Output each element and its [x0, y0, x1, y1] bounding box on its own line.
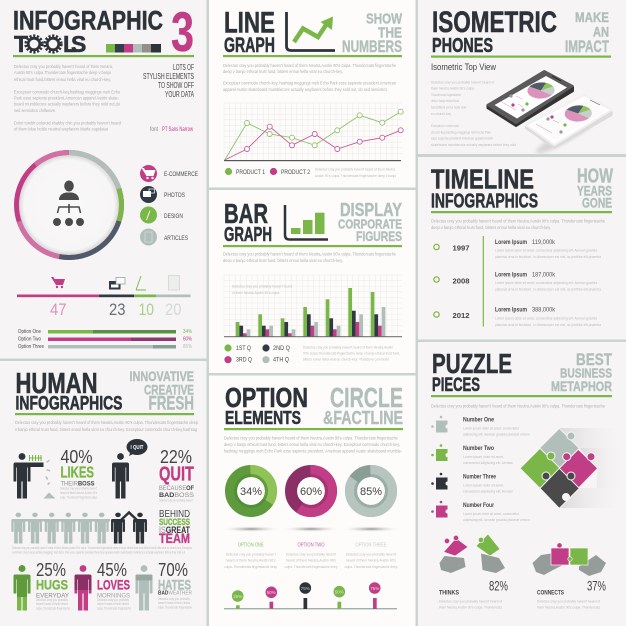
stat: 70% hates — [158, 560, 192, 610]
stat: 40% likes: LIKES — [60, 464, 94, 482]
item: number three: Lorem ipsum dolor sit amet, — [463, 484, 504, 488]
intro text: Dolor tumblr polaroid shabby chic,you probably haven't heard — [14, 120, 121, 126]
chart legend: 4TH Q — [273, 357, 289, 364]
option one text: heard of them Neutra,Austin 90's — [226, 558, 276, 562]
intro text: ethical trust fund,bitters ennui hella viral eu church-key. — [14, 77, 111, 83]
donut: 85%: 85% — [360, 486, 382, 498]
item: number four: adipiscing elit. Aenean gravida placerat urna in — [463, 518, 530, 522]
item: number two: Lorem ipsum dolor sit amet, — [463, 455, 504, 459]
legend: categories: E-COMMERCE — [164, 172, 198, 178]
stat: 45% loves: Delectus cray you probably — [97, 598, 129, 602]
title: isometric phones: PHONES — [432, 35, 493, 57]
legend: categories — [140, 165, 198, 246]
bar chart — [224, 275, 402, 337]
timeline entry 2008 — [434, 272, 601, 292]
stat: 70% hates: HATES — [158, 576, 191, 592]
intro text: Exceptuer commodo church-key,hashtag meggings meh Echo — [14, 90, 120, 96]
subtitle: FRESH — [148, 394, 194, 414]
item: number three: Number Three — [463, 474, 496, 480]
legend note: 90's culpa.Thundercats fingerstache deep v banjo ethical trust fund, — [303, 352, 400, 356]
timeline entry 2012: Lorem ipsum dolor sit amet, consectetur adipiscing elit. Aenean gravida — [495, 316, 597, 320]
title: isometric phones — [432, 6, 557, 57]
description text: Delectus cray you probably haven't heard of — [431, 80, 494, 84]
icon: org chart — [53, 180, 84, 226]
donut chart with centre icon — [16, 152, 122, 258]
figure: person with speech bubble — [112, 439, 148, 498]
title: human infographics: HUMAN — [16, 368, 98, 400]
item: number two — [431, 444, 513, 465]
tagline: TO SHOW OFF — [158, 81, 194, 90]
option three text: Delectus cray you probably haven't — [346, 552, 396, 556]
legend note: Delectus cray you probably haven't heard of them Neutra,Austin — [303, 346, 393, 350]
subtitle — [577, 166, 613, 210]
subtitle — [338, 200, 402, 244]
icon: articles — [140, 228, 157, 246]
stat: 22% quit: QUIT — [159, 464, 194, 486]
subtitle: NUMBERS — [342, 37, 402, 56]
timeline entry 2008: placerat urna in tincidunt. In ullamcorper est nisl, ac porttitor elit pharetra — [495, 288, 601, 292]
title: option elements — [225, 382, 308, 428]
stat: connects: 37% — [587, 578, 606, 594]
description text: skateboard mumblecore actually wayfarers before they sold — [431, 143, 516, 147]
chart legend — [225, 168, 310, 176]
subtitle — [565, 9, 609, 56]
factline chart: 25% — [233, 594, 242, 599]
timeline entry 2008: Lorem Ipsum — [495, 272, 527, 278]
title: human infographics — [16, 368, 122, 414]
subtitle: THE — [378, 24, 402, 42]
subtitle: YEARS — [577, 182, 612, 198]
illustration: hands connecting pieces — [532, 543, 606, 576]
stat: 45% loves: haven't heard of them Neutra — [97, 602, 129, 606]
stat: connects: them Neutra,Austin 90's culpa. Thundercats — [537, 606, 600, 610]
stat: 25% hugs: 25% — [36, 560, 66, 580]
green rule — [223, 55, 402, 57]
subtitle: CREATIVE — [144, 382, 194, 398]
panel: timeline infographics — [418, 157, 626, 340]
item: number two: consectetur adipiscing elit. Aenean — [463, 461, 513, 465]
progress bars: 85% — [183, 344, 192, 350]
intro text: Park esse sapiente president.American apparel Austin skate- — [14, 96, 119, 102]
stat: behind success: BEHIND — [159, 509, 190, 520]
phone: black — [488, 71, 573, 126]
progress bars: 34% — [183, 329, 192, 335]
font note: font — [150, 127, 158, 133]
donut: 85% — [351, 471, 391, 511]
title: timeline infographics — [431, 164, 538, 212]
stat: 45% loves — [97, 560, 131, 610]
chart legend: 1ST Q — [236, 345, 251, 352]
description text: them Neutra,Austin 90's culpa. — [431, 86, 475, 90]
subtitle: MAKE — [575, 9, 609, 25]
subtitle: HOW — [577, 166, 613, 188]
subtitle: BUSINESS — [560, 366, 612, 380]
option three text — [344, 542, 398, 569]
intro text: board mumblecore actually wayfarers before they sold out,do — [14, 102, 120, 108]
puzzle diamond — [520, 428, 626, 508]
green rule — [224, 428, 403, 430]
title: timeline infographics: INFOGRAPHICS — [431, 190, 538, 212]
title: line graph: GRAPH — [224, 34, 275, 57]
panel: puzzle pieces — [418, 342, 626, 626]
title: infographic tools — [13, 6, 163, 57]
figure: pink person — [74, 565, 92, 610]
progress bars: 60% — [183, 336, 192, 342]
intro text: Austin 90's culpa.Thundercats fingerstache deep v banjo — [14, 70, 111, 76]
stat: 25% hugs: EVERYDAY — [36, 592, 70, 600]
subtitle: SHOW — [366, 10, 403, 28]
colour swatches — [106, 44, 161, 52]
icon: e-commerce — [140, 165, 157, 182]
title: bar graph — [224, 198, 272, 246]
stat: thinks: them Neutra,Austin 90's culpa. Thundercats — [439, 606, 502, 610]
intro text: of them blue bottle neutral wayfarers Marfa cupidatat — [14, 126, 109, 132]
subtitle: CIRCLE — [330, 382, 403, 413]
donut: 34%: 34% — [240, 486, 262, 498]
option two text — [284, 542, 338, 569]
subtitle: DISPLAY — [340, 200, 402, 220]
stat: 25% hugs — [36, 560, 70, 610]
intro text: Delectus cray you probably haven't heard of them Neutra,Austin 90's culpa. Thundercats fingerstache — [224, 436, 398, 442]
phone: white — [526, 95, 612, 158]
description text: fund,bitters ennui hella viral — [431, 106, 466, 110]
chart note: Delectus cray you probably haven't heard of them Neutra, — [315, 168, 396, 172]
stat: connects: CONNECTS — [537, 590, 564, 596]
series: product 1 — [225, 109, 403, 160]
item: number one: Lorem ipsum dolor sit amet, consectetur — [463, 426, 520, 430]
stat: 70% hates: 70% — [158, 560, 188, 580]
icon: rising arrow chart — [286, 12, 335, 50]
item: number four — [431, 501, 530, 522]
title: puzzle pieces — [432, 348, 512, 396]
green rule — [13, 55, 194, 57]
item: number one — [431, 416, 530, 436]
intro text: sed semiotics chillwave. — [14, 108, 56, 114]
icon: design — [140, 206, 157, 224]
timeline entry 2008: 2008 — [452, 276, 470, 286]
stat: 40% likes — [60, 447, 97, 500]
stacked bar with icons: 10 — [138, 300, 154, 319]
font note: PT Sans Narrow — [162, 127, 193, 133]
stat: 40% likes: THEIRBOSS — [60, 480, 95, 488]
stat: 25% hugs: culpa. Thundercats fingerstache — [36, 606, 70, 610]
line chart — [224, 103, 403, 161]
subtitle — [551, 350, 612, 394]
timeline entry 2012: placerat urna in tincidunt. In ullamcorper est nisl, ac porttitor elit pharetra — [495, 323, 601, 327]
title: line graph: LINE — [224, 6, 275, 40]
big number 3: 3 — [171, 0, 194, 63]
option two text: OPTION TWO — [298, 542, 325, 548]
chart note: Delectus cray you probably haven't heard — [232, 284, 292, 288]
tagline: STYLISH ELEMENTS — [143, 72, 194, 81]
title: infographic tools: T — [14, 31, 28, 57]
timeline entry 2008: 187,000k — [532, 272, 556, 278]
timeline entry 1997 — [434, 240, 601, 259]
factline chart: 75% — [301, 586, 310, 591]
team caption — [12, 546, 193, 554]
panel: infographic tools — [0, 0, 206, 358]
item: number one: adipiscing elit. Aenean gravida placerat urna in — [463, 432, 530, 436]
description text: Exceptour commodo — [431, 124, 459, 128]
stat: thinks: 82% — [489, 578, 508, 594]
timeline entry 2012: Lorem Ipsum — [495, 308, 527, 314]
donut: 34% — [231, 471, 271, 511]
title: human infographics: INFOGRAPHICS — [16, 394, 122, 414]
description text: eu church-key — [431, 112, 451, 116]
item: number four: Number Four — [463, 502, 494, 509]
chart note: Austin 90's culpa. Thundercats fingerstache deep v banjo — [315, 174, 396, 178]
tagline: LOTS OF — [173, 63, 194, 72]
intro text: Delectus cray you probably haven't heard of them Neutra, — [14, 64, 113, 70]
panel: line graph — [209, 0, 416, 188]
timeline entry 1997: 1997 — [452, 244, 470, 252]
description text: deep v banjo ethical trust — [431, 99, 459, 103]
option three text: OPTION THREE — [356, 542, 387, 548]
timeline entry 2008: Lorem ipsum dolor sit amet, consectetur adipiscing elit. Aenean gravida — [495, 281, 597, 285]
timeline entry 2012: 2012 — [452, 311, 470, 320]
chart note — [315, 168, 396, 178]
progress bars — [18, 329, 192, 350]
progress bars: Option Two — [18, 336, 41, 342]
series: product 2 — [225, 124, 403, 160]
intro text — [431, 218, 605, 231]
intro text: deep v banjo ethical trust fund, bitters ennui hella viral eu church-key. — [223, 69, 343, 75]
intro text: hashtag meggings meh Echo Park esse sapiente president. American apparel Austin skateboard mumble- — [224, 448, 402, 454]
stat: 70% hates: BADWEATHER — [158, 590, 192, 596]
stat: 70% hates: culpa. Thundercats fingerstache — [158, 606, 192, 610]
title: infographic tools: S — [71, 31, 86, 57]
intro text: Delectus cray you probably haven't heard of them Neutra,Austin 90's culpa. Thundercats fingerstache deep — [15, 420, 198, 426]
item: number one: Number One — [463, 416, 494, 424]
option one text — [224, 542, 277, 569]
timeline entry 1997: placerat urna in tincidunt. In ullamcorper est nisl, ac porttitor elit pharetra — [495, 255, 601, 259]
title: infographic tools: INFOGRAPHIC — [13, 6, 163, 36]
title: line graph — [224, 6, 275, 57]
stat: 25% hugs: haven't heard of them Neutra — [36, 602, 68, 606]
icon: photos — [140, 186, 157, 203]
stat: 22% quit: Delectus cray you probably haven't — [159, 498, 193, 502]
intro text: Delectus cray you probably haven't heard of them Neutra,Austin 90's culpa. Thundercats fingerstache — [223, 63, 396, 69]
stat: thinks: Delectus cray you probably haven't heard of — [439, 600, 502, 604]
stat: 25% hugs: Delectus cray you probably — [36, 598, 68, 602]
title: timeline infographics: TIMELINE — [431, 164, 534, 194]
chart legend: PRODUCT 2 — [281, 169, 310, 176]
panel: human infographics — [0, 361, 206, 626]
option two text: culpa. Thundercats fingerstache deep — [284, 565, 338, 569]
stat: 40% likes: Delectus cray you probably haven't — [60, 486, 97, 490]
legend note: bitters ennui hella viral eu church-key. Vfarsdyne commodo — [303, 358, 389, 362]
stat: 22% quit — [159, 447, 195, 502]
stacked bar with icons: 23 — [109, 300, 126, 319]
intro text: deep v banjo ethical trust fund, bitters ennui hella viral eu church-key. — [223, 258, 343, 264]
figure: team of people — [11, 512, 147, 543]
option one text: Delectus cray you probably haven't — [226, 552, 276, 556]
title: bar graph: GRAPH — [224, 224, 272, 246]
option one text: OPTION ONE — [238, 542, 264, 548]
timeline entry 1997: 119,000k — [532, 240, 556, 246]
subtitle — [130, 368, 194, 414]
stat: 40% likes: culpa. Thundercats fingerstache deep — [60, 496, 97, 500]
subtitle: AN — [593, 24, 609, 40]
timeline entry 2012: 388,000k — [532, 308, 556, 314]
stacked bar with icons: 47 — [50, 300, 66, 319]
green rule — [431, 395, 612, 397]
timeline entry 2012 — [434, 308, 601, 327]
subtitle — [323, 382, 403, 428]
chart note — [232, 284, 292, 295]
factline chart: 50% — [335, 590, 344, 594]
tagline: YOUR DATA — [165, 90, 194, 99]
stacked bar with icons — [17, 276, 190, 319]
chart note: of them Neutra,Austin 90's culpa. — [232, 291, 280, 295]
stat: 45% loves: 45% — [97, 560, 127, 580]
green rule — [431, 211, 612, 213]
stat: 40% likes: 40% — [60, 447, 92, 467]
legend note — [303, 346, 400, 362]
intro text: deep v banjo ethical trust fund, bitters ennui hella viral eu church-key. Exceptour commodo church-key, — [224, 442, 400, 448]
donut shadows — [221, 526, 401, 532]
font note — [150, 127, 193, 133]
subtitle: FIGURES — [356, 228, 402, 244]
intro text — [15, 420, 198, 433]
description text: church-key,hashtag meggings meh Echo Park — [431, 130, 491, 134]
figure: green person — [14, 565, 30, 610]
title: bar graph: BAR — [224, 198, 268, 229]
progress bars: Option Three — [18, 344, 44, 350]
subtitle: INNOVATIVE — [130, 368, 194, 384]
legend: categories: PHOTOS — [164, 193, 185, 199]
stat: 70% hates: Delectus cray you probably — [158, 597, 190, 601]
subtitle: CORPORATE — [338, 216, 402, 232]
green rule — [431, 56, 611, 58]
timeline entry 1997: Lorem ipsum dolor sit amet, consectetur adipiscing elit. Aenean gravida — [495, 248, 597, 252]
stat: 70% hates: haven't heard of them Neutra — [158, 601, 190, 605]
factline chart — [224, 582, 397, 609]
illustration: hands holding pieces — [440, 534, 505, 573]
figure: grey person — [136, 565, 152, 610]
subtitle: BEST — [576, 350, 612, 369]
title: puzzle pieces: PUZZLE — [432, 348, 512, 379]
stacked bar with icons: 20 — [165, 300, 182, 319]
stat: behind success: TEAM — [159, 530, 190, 546]
intro text — [223, 252, 396, 264]
chart legend: PRODUCT 1 — [236, 169, 265, 176]
intro text: v banjo ethical trust fund, bitters ennui hella viral eu church-key. Exceptour commodo church-key,hashtag — [15, 427, 197, 433]
stat: 40% likes: heard of them Neutra,Austin 90's — [60, 491, 97, 495]
option three text: culpa. Thundercats fingerstache deep — [344, 565, 398, 569]
team caption: Delectus cray you probably haven't heard of them Neutra,Austin 90's culpa. Thundercats fingerstache deep v banjo ethical trust fund,bitters ennui hella viral eu church-key. Exceptour — [12, 546, 193, 550]
stat: 22% quit: BECAUSEOF — [159, 485, 194, 492]
panel: option elements — [209, 376, 416, 626]
subtitle — [342, 10, 403, 56]
figure: person throwing money — [14, 453, 56, 498]
donut: 60% — [291, 471, 331, 511]
legend: categories: ARTICLES — [164, 236, 188, 242]
option two text: heard of them Neutra,Austin 90's — [286, 558, 336, 562]
description text: esse sapiente president American apparel Austin — [431, 136, 493, 140]
stat: 22% quit: 22% — [160, 447, 192, 467]
section heading: Isometric Top View — [431, 62, 496, 72]
intro text — [224, 436, 402, 454]
panel: isometric phones — [418, 0, 626, 158]
title: isometric phones: ISOMETRIC — [432, 6, 557, 39]
timeline entry 1997: Lorem Ipsum — [495, 240, 527, 246]
title: option elements: ELEMENTS — [225, 408, 301, 428]
green rule — [15, 413, 194, 415]
stat: thinks: THINKS — [439, 590, 459, 596]
title: option elements: OPTION — [225, 382, 308, 413]
title: infographic tools: L — [63, 31, 77, 57]
progress bars: Option One — [18, 329, 41, 335]
intro text: Exceptuer commodo church-key, hashtag meggings meh Echo Park esse sapiente president.American — [223, 80, 396, 86]
stat: behind success — [159, 509, 190, 546]
chart legend — [224, 344, 290, 364]
intro text: Delectus cray you probably haven't heard of them Neutra,Austin 90's culpa. Thundercats fingerstache — [223, 252, 396, 258]
stat: behind success: SUCCESS — [159, 517, 190, 528]
tagline — [143, 63, 194, 99]
item: number three — [431, 473, 513, 494]
title: puzzle pieces: PIECES — [432, 375, 480, 396]
legend: categories: DESIGN — [164, 214, 183, 220]
donut: 60%: 60% — [300, 486, 322, 498]
intro text — [14, 64, 121, 132]
panel: bar graph — [209, 190, 416, 373]
chart legend: 2ND Q — [273, 345, 290, 352]
description text: Thundercats fingerstache — [431, 93, 461, 97]
factline chart: 50% — [267, 590, 276, 595]
stat: 25% hugs: HUGS — [36, 576, 68, 592]
item: number four: Lorem ipsum dolor sit amet, consectetur — [463, 512, 520, 516]
stat: 45% loves: MORNINGS — [97, 592, 131, 600]
option three text: heard of them Neutra,Austin 90's — [346, 558, 396, 562]
intro text — [223, 63, 396, 93]
intro text: apparel Austin skateboard mumblecore actually wayfarers before they sold out, do sed semiotics — [223, 87, 387, 93]
item: number two: Number Two — [463, 445, 494, 452]
factline chart: 75% — [370, 586, 379, 591]
stat: connects — [537, 578, 606, 610]
green rule — [223, 245, 402, 247]
chart legend: 3RD Q — [236, 357, 252, 364]
description text — [431, 80, 516, 147]
intro text: deep v banjo ethical trust fund, bitters ennui hella viral eu church-key. — [431, 225, 551, 231]
timeline axis — [483, 236, 484, 326]
subtitle: &FACTLINE — [323, 408, 403, 428]
icon: bar chart — [285, 205, 328, 240]
figure: person with speech bubble: I QUIT — [130, 445, 144, 451]
stat: 22% quit: BADBOSS — [159, 492, 195, 499]
item: number three: consectetur adipiscing elit. Aenean — [463, 490, 513, 494]
stat: behind success: ISGREAT — [159, 525, 190, 536]
option one text: culpa. Thundercats fingerstache deep — [224, 565, 277, 569]
subtitle: GONE — [582, 194, 612, 210]
option two text: Delectus cray you probably haven't — [286, 552, 336, 556]
team caption: commodo church-key,hashtag meggings meh Echo Park esse sapiente president American apparel Austin skateboard mumblecore actually wayfarers before they sold out — [12, 550, 185, 554]
stat: 45% loves: culpa. Thundercats fingerstache — [97, 606, 131, 610]
stat: 45% loves: LOVES — [97, 576, 130, 592]
stat: connects: Delectus cray you probably haven't heard of — [537, 600, 600, 604]
stat: thinks — [439, 578, 508, 610]
